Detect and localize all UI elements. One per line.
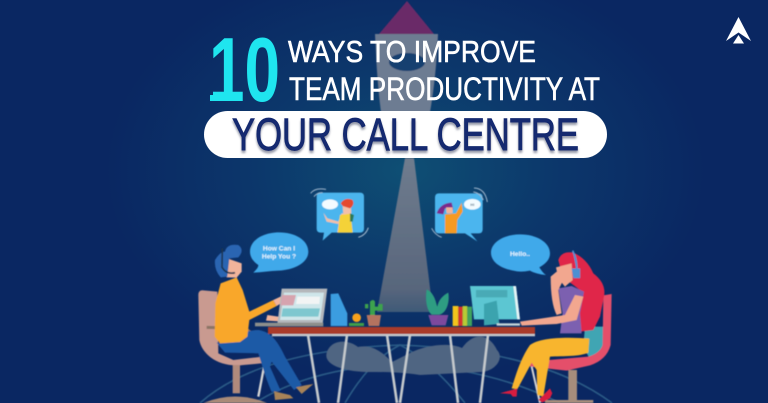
man legs: [217, 330, 302, 392]
rocket illustration: [375, 1, 438, 312]
title line 1: WAYS TO IMPROVE: [288, 34, 536, 69]
video call card: colleague: [432, 188, 487, 241]
man speech bubble: How Can I: [263, 245, 295, 252]
woman speech bubble: [491, 234, 550, 275]
man torso: [215, 277, 277, 343]
video call card: colleague: Hi: [470, 202, 474, 207]
globe and clouds: [200, 336, 612, 403]
headset: [573, 251, 579, 277]
woman speech bubble: Hello..: [510, 251, 530, 258]
monitor: [470, 286, 520, 326]
man head: [227, 258, 242, 278]
cactus: [365, 300, 383, 326]
laptop: [255, 289, 327, 326]
icon: logo: [726, 17, 751, 44]
man speech bubble: Help You ?: [262, 254, 296, 261]
desk: [268, 327, 535, 403]
man chair: [198, 290, 277, 403]
plant: [426, 289, 449, 325]
number 10: 10: [209, 20, 280, 121]
woman chair: [530, 294, 612, 403]
man speech bubble: [250, 232, 308, 273]
woman torso and arms: [558, 286, 584, 333]
man on the left: [198, 189, 383, 403]
title: [204, 20, 607, 160]
woman on the right: [426, 188, 612, 403]
books: [453, 306, 472, 326]
woman legs: [512, 338, 589, 397]
woman hair: [558, 252, 604, 332]
scene: agents at desk: [198, 188, 612, 403]
title line 2: TEAM PRODUCTIVITY AT: [289, 71, 600, 107]
orange fruit: [349, 313, 364, 326]
title pill: YOUR CALL CENTRE: [232, 109, 579, 160]
woman face: [556, 263, 573, 287]
file holder: [331, 293, 347, 326]
video call card: customer: [311, 189, 368, 241]
